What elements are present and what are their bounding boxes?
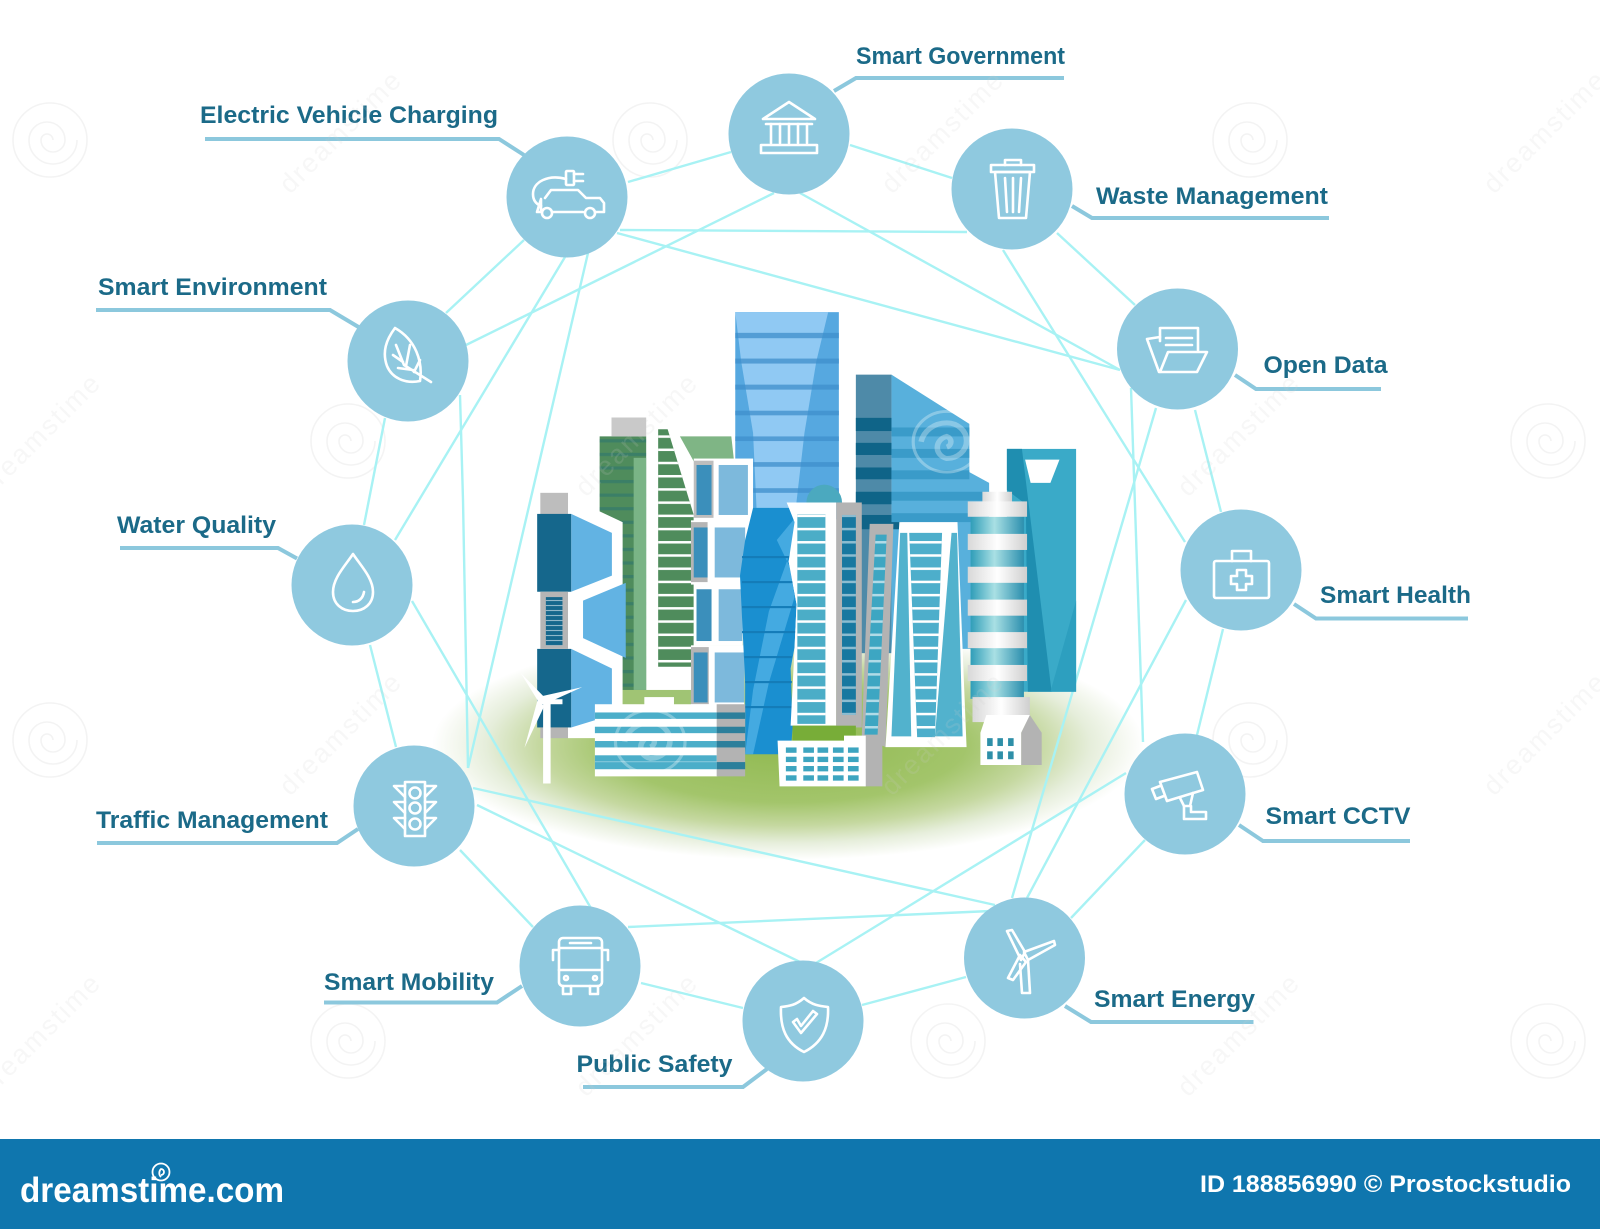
icon: electric car with plug [533, 171, 604, 218]
node: Smart Mobility [324, 906, 640, 1026]
node: Water Quality [117, 512, 412, 646]
label: Electric Vehicle Charging: Electric Vehicle Charging [200, 102, 498, 129]
building: tall blue tower [735, 312, 839, 519]
building: angled blue tower [856, 375, 989, 653]
building: low striped block [595, 697, 745, 776]
label: Smart Mobility: Smart Mobility [324, 969, 495, 996]
icon: shield with check [781, 998, 828, 1052]
watermark text: dreamstime [1171, 967, 1306, 1102]
watermark text: dreamstime [273, 666, 408, 801]
watermark text: dreamstime [875, 64, 1010, 199]
city skyline illustration [521, 312, 1076, 786]
building: kingdom-style tower [1007, 449, 1076, 692]
label: Water Quality: Water Quality [117, 512, 277, 539]
icon: CCTV camera [1152, 772, 1206, 819]
label: Smart Energy: Smart Energy [1094, 986, 1256, 1013]
building: small house [980, 715, 1042, 765]
icon: leaf [385, 328, 431, 382]
wind turbine [521, 673, 582, 784]
green ground glow [432, 630, 1144, 860]
footer logo spiral [152, 1164, 170, 1180]
watermark text: dreamstime [273, 64, 408, 199]
icon: trash bin [991, 160, 1034, 218]
icon: traffic light [394, 782, 436, 836]
building: pale green back block [680, 436, 734, 461]
icon: first aid kit [1214, 551, 1269, 598]
spiral watermarks over city [615, 411, 980, 773]
footer image credit: ID 188856990 © Prostockstudio [1200, 1171, 1571, 1198]
node: Open Data [1117, 288, 1388, 410]
building: green and white tower [600, 417, 698, 704]
label: Smart CCTV: Smart CCTV [1266, 803, 1410, 830]
watermark spirals [13, 103, 1585, 1078]
node: Waste Management [952, 128, 1329, 250]
label: Public Safety: Public Safety [576, 1051, 733, 1078]
icon: water drop [333, 554, 373, 611]
node: Smart Government [728, 43, 1065, 194]
node: Smart Environment [96, 274, 468, 422]
node: Smart Energy [964, 898, 1256, 1022]
node: Electric Vehicle Charging [200, 102, 628, 258]
footer logo text: dreamstime.com [20, 1171, 284, 1210]
watermark text: dreamstime [569, 967, 704, 1102]
node: Traffic Management [96, 746, 474, 866]
building: central white tower with dome [787, 485, 862, 727]
label: Traffic Management: Traffic Management [96, 807, 328, 834]
building: stacked module tower [691, 459, 753, 706]
icon: government building [761, 102, 817, 153]
footer bar [0, 1139, 1600, 1229]
watermark text: dreamstime [569, 367, 704, 502]
watermark text: dreamstime [1171, 367, 1306, 502]
icon: wind turbine [1007, 930, 1055, 993]
label: Open Data: Open Data [1264, 352, 1388, 379]
network connection lines [364, 145, 1223, 1008]
building: twisted blue tower [740, 508, 797, 754]
node: Smart Health [1180, 510, 1471, 630]
watermark text: dreamstime [875, 666, 1010, 801]
label: Smart Environment: Smart Environment [98, 274, 327, 301]
label: Waste Management: Waste Management [1096, 183, 1328, 210]
building: twin angled tower [862, 522, 967, 747]
building: striped cylinder tower [968, 492, 1030, 722]
icon: bus [553, 938, 608, 994]
icon: open folder [1147, 328, 1207, 372]
label: Smart Health: Smart Health [1320, 582, 1471, 609]
building: left hexagon tower [537, 493, 626, 738]
node: Smart CCTV [1124, 734, 1410, 854]
label: Smart Government: Smart Government [856, 43, 1065, 70]
building: small office with green roof [778, 726, 882, 786]
node: Public Safety [576, 960, 864, 1087]
